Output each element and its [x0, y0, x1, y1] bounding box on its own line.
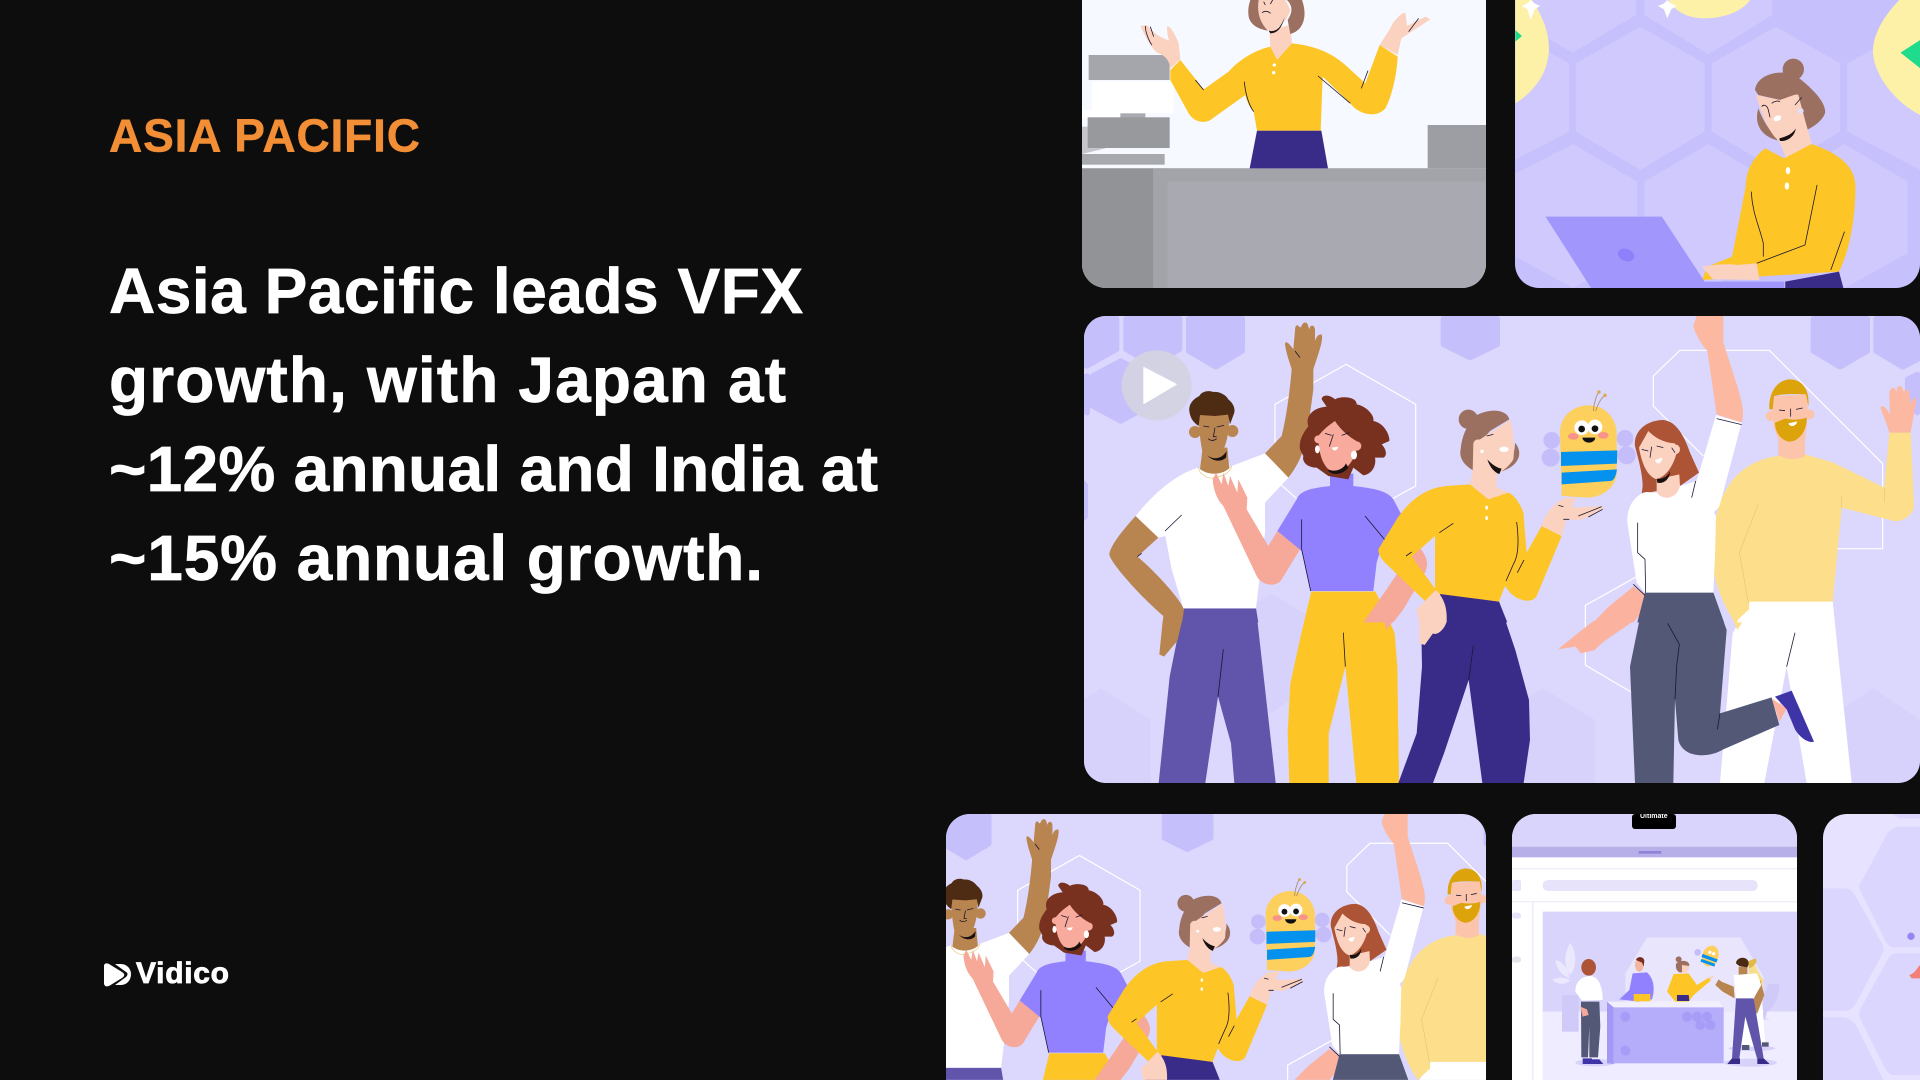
logo: Vidico	[104, 957, 229, 990]
notch label: Ultimate	[1640, 813, 1668, 820]
person: woman with purple top and yellow pants	[1213, 396, 1427, 622]
person: woman with white top	[1593, 316, 1743, 622]
panel: top-left office scene	[1082, 0, 1486, 288]
headline text block: growth, with Japan at	[109, 344, 786, 416]
team upper bodies	[1084, 316, 1917, 622]
headline text block: Asia Pacific leads VFX	[109, 255, 803, 327]
hands reaching below the waist	[1159, 618, 1633, 657]
icon: play button	[1122, 350, 1192, 420]
green coin marks and sparkles	[1515, 0, 1920, 68]
head of woman at laptop	[1755, 59, 1825, 159]
person: man with white shirt	[1109, 323, 1322, 622]
panel: bottom-middle web page mockup	[1512, 813, 1797, 1080]
woman shrugging	[1140, 0, 1430, 168]
panel: top-right laptop scene	[1504, 0, 1920, 288]
gold coins	[1515, 0, 1920, 115]
desk and file boxes	[1082, 55, 1486, 288]
icon: play logo mark	[104, 963, 131, 986]
honeycomb background	[1084, 319, 1917, 622]
headline text block: ~12% annual and India at	[109, 433, 878, 505]
team illustration repeat	[946, 814, 1486, 1080]
panel: bottom-left team card	[946, 814, 1486, 1080]
panel: main video card with team illustration	[1084, 316, 1920, 783]
notch label	[1632, 813, 1676, 829]
panel: bottom-right cropped card	[1823, 814, 1920, 1080]
headline text block	[109, 255, 878, 594]
icon: bee mascot	[1542, 390, 1636, 498]
woman working on laptop	[1546, 144, 1855, 288]
small dot and red shape	[1907, 933, 1920, 978]
honeycomb background	[1504, 0, 1920, 288]
person: man with yellow sweater	[1712, 379, 1916, 622]
wordmark: Vidico	[136, 957, 229, 990]
page header bands	[1512, 814, 1797, 1080]
lower bodies: legs and faint honeycomb	[1084, 592, 1920, 783]
person: woman with yellow blouse	[1378, 410, 1603, 622]
page hero illustration	[1543, 912, 1797, 1080]
counter with team members	[1575, 943, 1770, 1064]
headline text block: ~15% annual growth.	[109, 522, 763, 594]
eyebrow heading: ASIA PACIFIC: ASIA PACIFIC	[109, 110, 420, 162]
honeycomb pattern	[1823, 814, 1920, 1080]
